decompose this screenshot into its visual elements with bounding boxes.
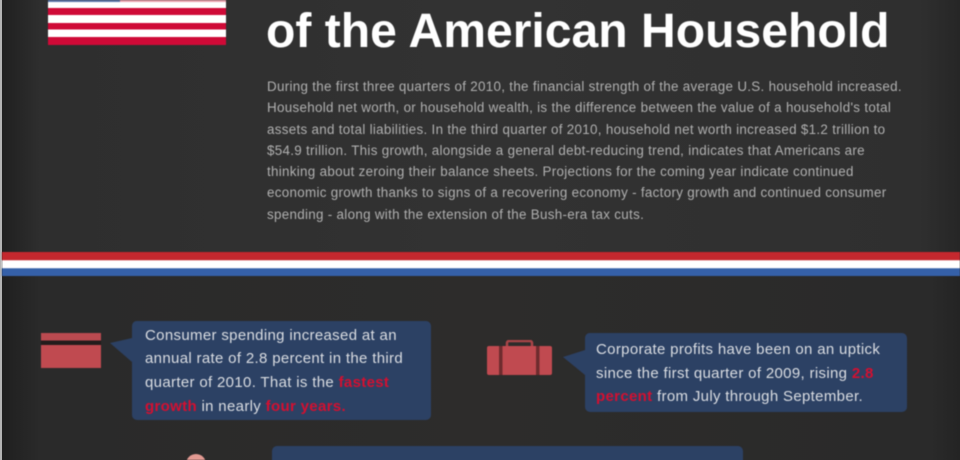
callout: corporate profits: since the first quarter of 2009, rising 2.8: [596, 365, 874, 382]
callout: corporate profits: Corporate profits have been on an uptick: [596, 341, 880, 358]
icon: american flag: [47, 0, 227, 46]
intro paragraph: spending - along with the extension of the Bush-era tax cuts.: [267, 207, 644, 222]
callout: consumer spending: growth in nearly four years.: [145, 398, 346, 415]
tricolor divider: [2, 252, 960, 276]
intro paragraph: thinking about zeroing their balance sheets. Projections for the coming year indicate continued: [267, 164, 854, 179]
callout: consumer spending: [110, 320, 432, 420]
intro paragraph: economic growth thanks to signs of a recovering economy - factory growth and continued consumer: [267, 185, 886, 200]
left page edge: [0, 0, 2, 460]
intro paragraph: [266, 79, 902, 223]
callout: consumer spending: Consumer spending increased at an: [145, 327, 397, 344]
icon: partially visible round icon: [186, 453, 206, 460]
background lower panel: [0, 276, 960, 460]
title: of the American Household: [266, 4, 890, 58]
callout: consumer spending: annual rate of 2.8 percent in the third: [145, 350, 403, 367]
callout: corporate profits: percent from July through September.: [596, 388, 863, 405]
intro paragraph: assets and total liabilities. In the third quarter of 2010, household net worth increased $1.2 trillion to: [267, 122, 885, 137]
intro paragraph: $54.9 trillion. This growth, alongside a general debt-reducing trend, indicates that Americans are: [267, 143, 865, 158]
intro paragraph: Household net worth, or household wealth, is the difference between the value of a household's total: [267, 100, 891, 115]
background top panel: [0, 0, 960, 252]
callout: corporate profits: [563, 332, 908, 412]
callout: consumer spending: quarter of 2010. That is the fastest: [145, 374, 389, 391]
intro paragraph: During the first three quarters of 2010, the financial strength of the average U.S. household increased.: [267, 79, 902, 94]
icon: briefcase: [486, 339, 553, 376]
icon: credit card: [40, 332, 102, 369]
callout: cropped bottom bubble: [272, 446, 743, 460]
